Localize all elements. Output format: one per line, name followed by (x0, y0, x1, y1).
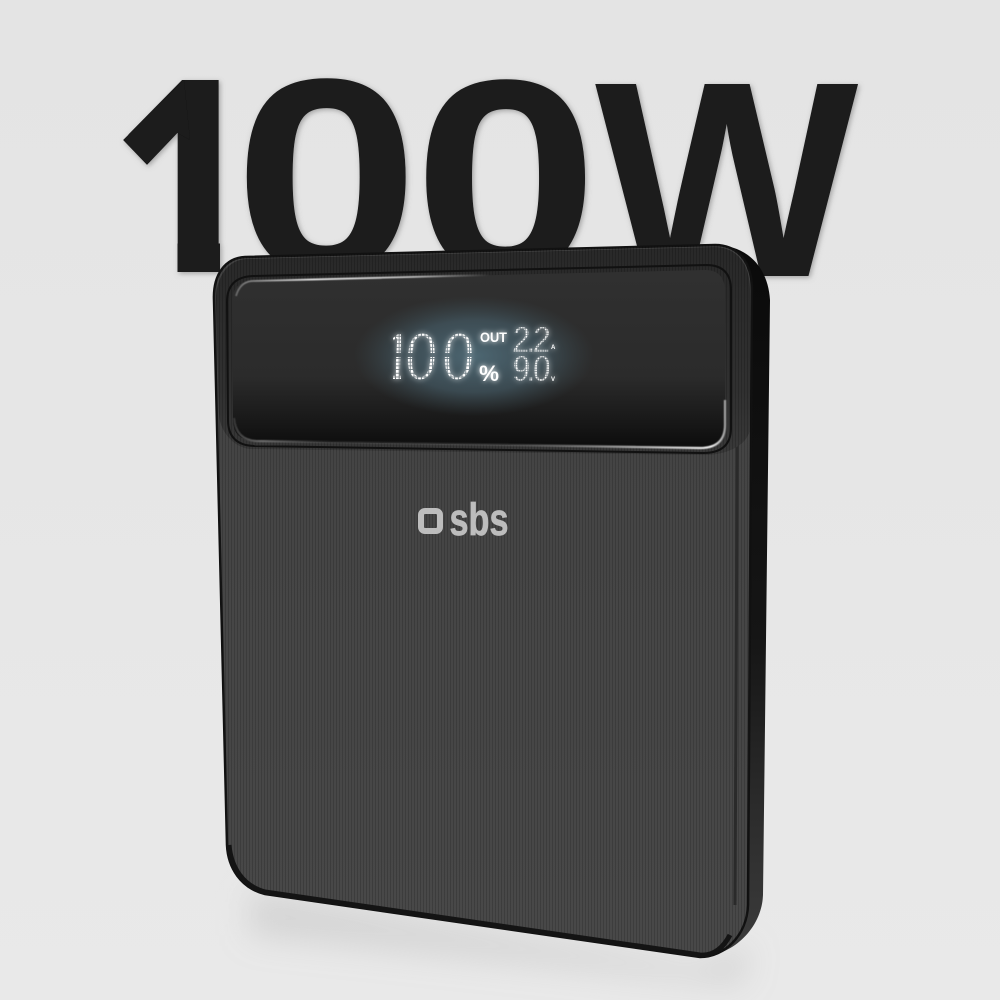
lcd glow (354, 296, 594, 416)
lcd label OUT: OUT (480, 330, 508, 345)
lcd amps and volts values (512, 320, 551, 390)
lcd percentage 100: 0 (440, 320, 476, 395)
frame ribbing (216, 247, 750, 455)
digit 0, first: 0 (234, 21, 419, 333)
lcd readout (390, 324, 558, 384)
digits 00: 0 (403, 320, 439, 395)
device front face (214, 245, 752, 957)
diagonal flag accent on the digit 1 (123, 112, 178, 168)
lcd percentage 100 (390, 330, 475, 383)
frame around display window (216, 247, 750, 455)
digit 1: 1 (108, 20, 274, 332)
unit V: V (551, 377, 555, 383)
sbs logo (421, 494, 508, 545)
value 2.2: 2.2 (512, 320, 551, 361)
front bottom rim (229, 845, 730, 955)
value 9.0: 9.0 (512, 349, 551, 390)
letter W: W (595, 24, 861, 336)
display top highlight (236, 275, 490, 296)
digit 0, second: 0 (413, 22, 599, 334)
floor shadow (250, 890, 750, 985)
unit A: A (551, 345, 556, 351)
digit 1: 1 (379, 320, 415, 395)
heading: 100W (123, 76, 862, 280)
frame outer groove (227, 265, 731, 453)
infographic canvas (122, 76, 862, 980)
logo wordmark: sbs (450, 494, 508, 545)
digit 1 (123, 78, 224, 276)
lcd percent sign: % (479, 361, 499, 386)
display bottom highlight (234, 400, 725, 448)
power bank (214, 245, 770, 957)
device side and back edge (214, 245, 770, 957)
display window (232, 270, 725, 448)
logo square icon (421, 511, 440, 531)
front face fine ribbing (214, 245, 752, 957)
right side groove (735, 290, 738, 905)
